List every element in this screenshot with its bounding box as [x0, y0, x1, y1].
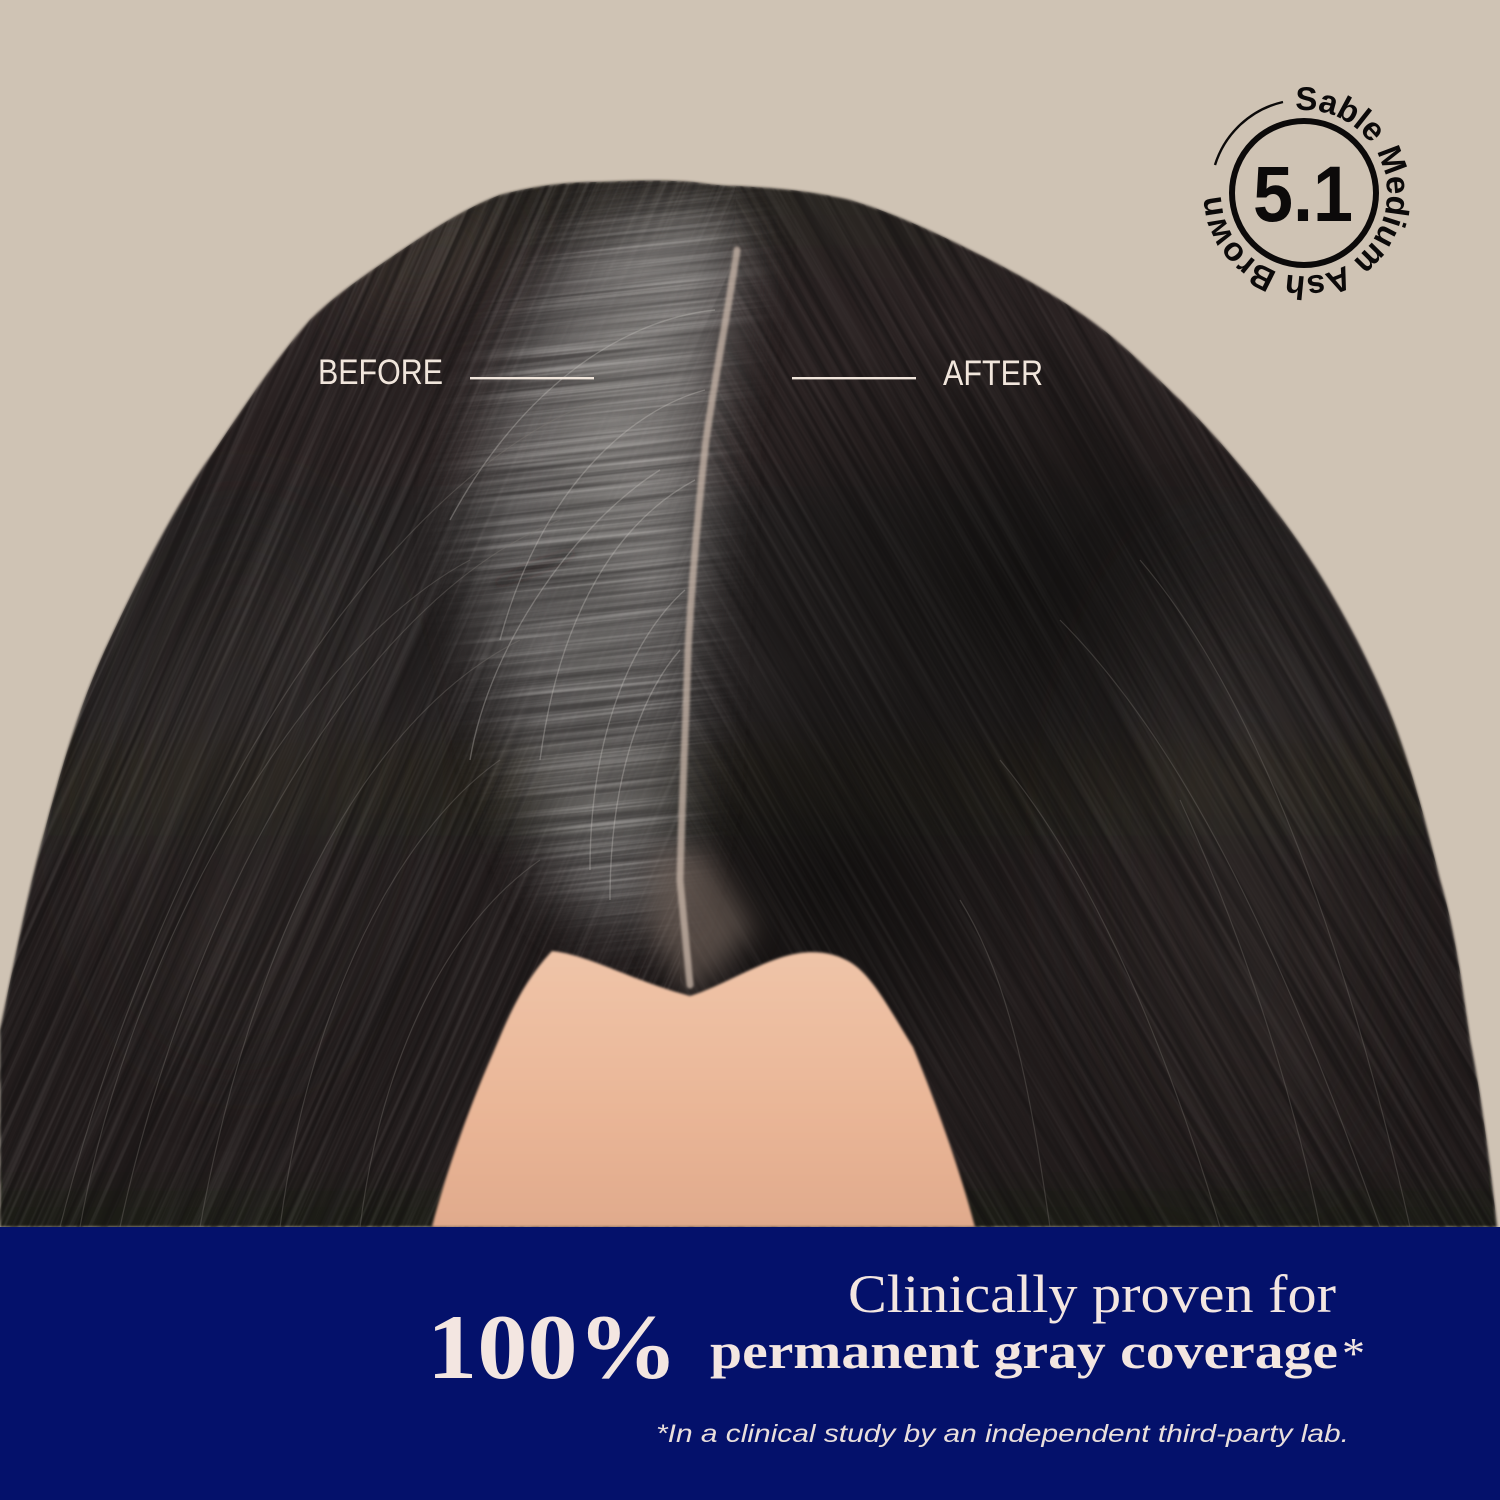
footnote: *In a clinical study by an independent third-party lab.: [656, 1420, 1349, 1448]
100% statistic: 100%: [427, 1296, 678, 1398]
navy claim band: [0, 1227, 1500, 1500]
asterisk: *: [1342, 1329, 1365, 1378]
scalp part line: [650, 250, 755, 995]
shade badge: 5.1: [1253, 149, 1353, 238]
after label with leader line: AFTER: [943, 354, 1043, 393]
forehead skin: [432, 951, 975, 1227]
claim line two: permanent gray coverage: [710, 1323, 1338, 1379]
hair: [0, 178, 1499, 1227]
shade badge: Sable Medium Ash Brown: [1204, 87, 1410, 300]
claim line one: Clinically proven for: [848, 1264, 1336, 1324]
before label with leader line: BEFORE: [318, 353, 443, 392]
